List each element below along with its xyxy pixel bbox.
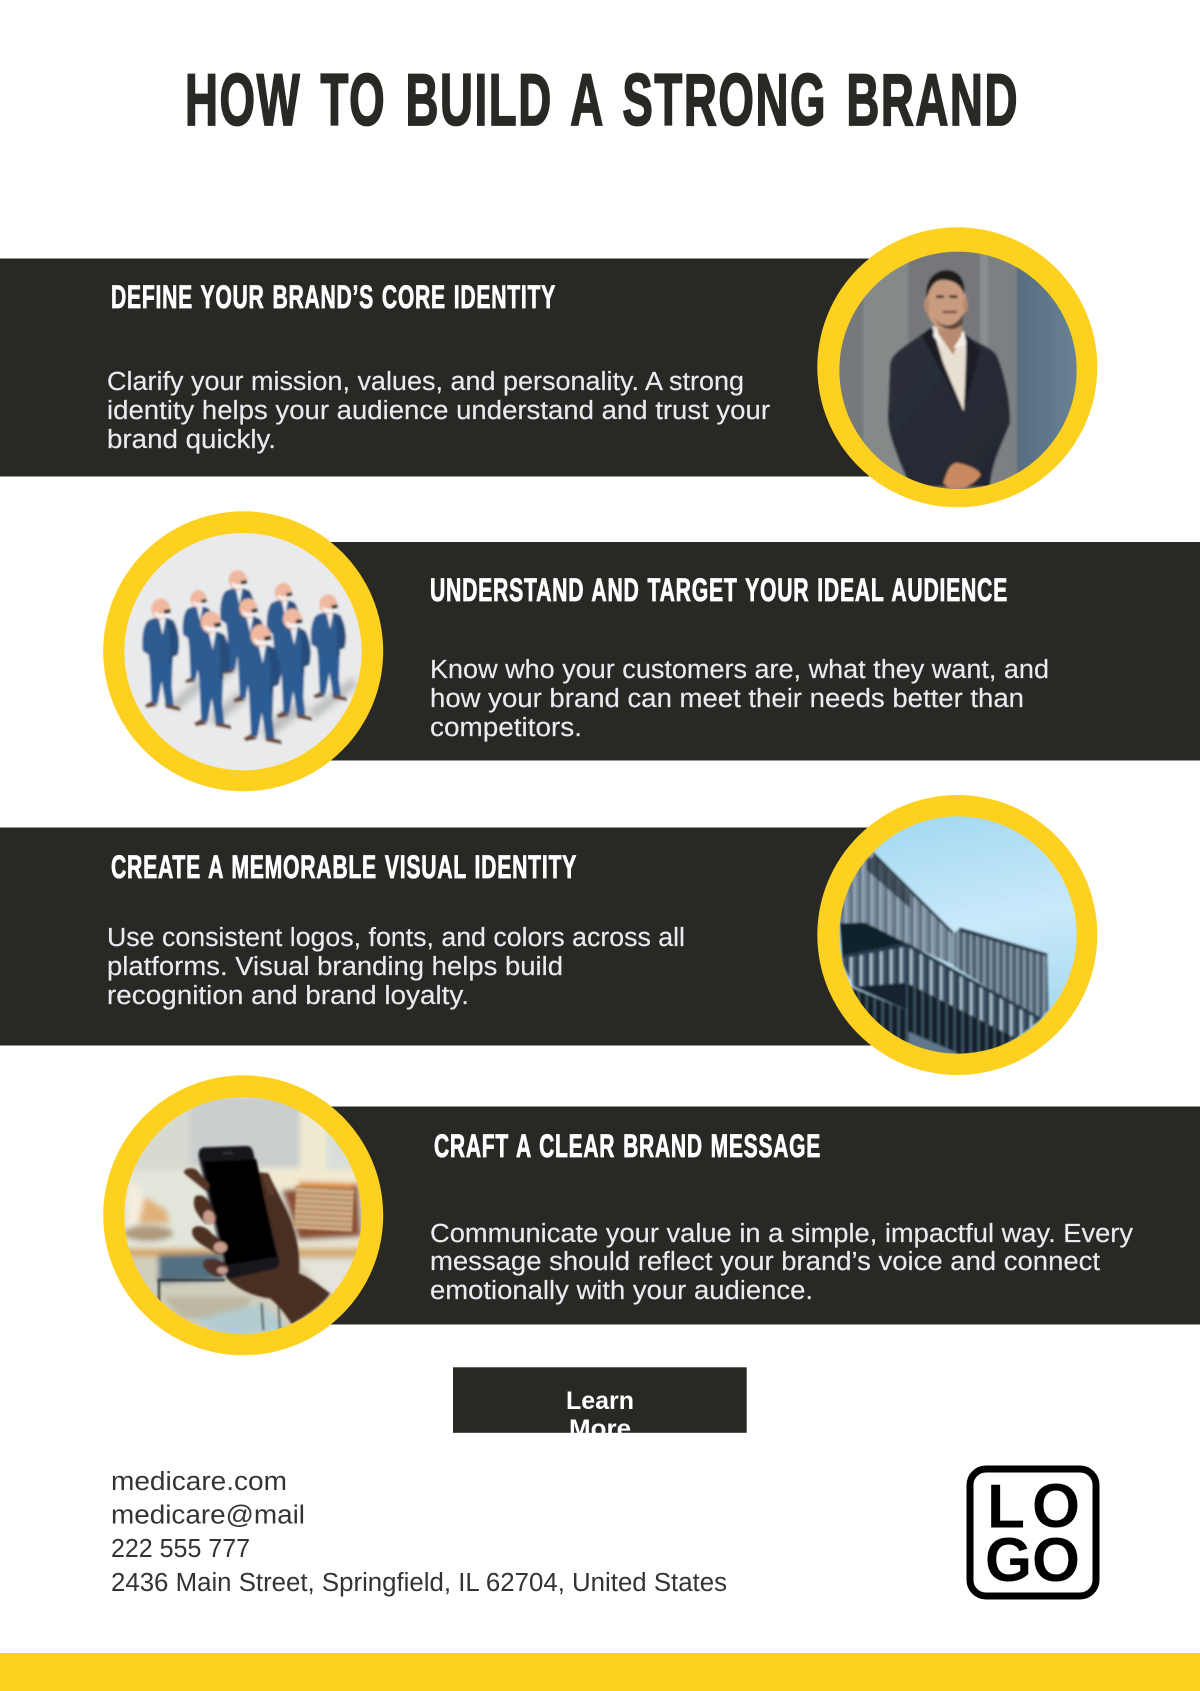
body text: emotionally with your audience. (430, 1277, 813, 1305)
heading: CREATE A MEMORABLE VISUAL IDENTITY (111, 849, 577, 885)
body text: message should reflect your brand’s voice and connect (430, 1248, 1100, 1276)
button: learn more (453, 1367, 747, 1433)
panel: craft a clear brand message (103, 1075, 1200, 1355)
photo: man in a dark suit (837, 250, 1081, 493)
logo: O (1032, 1472, 1080, 1541)
body text: Know who your customers are, what they want, and (430, 656, 1049, 684)
panel: define your brand's core identity (0, 227, 1097, 507)
yellow ring (103, 1075, 383, 1355)
body text: recognition and brand loyalty. (107, 982, 469, 1010)
yellow ring (817, 227, 1097, 507)
body text: how your brand can meet their needs better than (430, 685, 1024, 713)
photo: group of men in blue suits (122, 532, 365, 775)
body text (107, 368, 771, 454)
contact details: 222 555 777 (111, 1535, 250, 1563)
body text (430, 656, 1049, 742)
panel background bar (250, 542, 1200, 760)
logo (970, 1469, 1096, 1596)
heading: CRAFT A CLEAR BRAND MESSAGE (434, 1128, 821, 1164)
body text: Use consistent logos, fonts, and colors across all (107, 924, 685, 952)
body text: brand quickly. (107, 426, 276, 454)
panel: create a memorable visual identity (0, 795, 1097, 1075)
photo: hand holding a smartphone in a living room (122, 1093, 365, 1340)
panel: understand and target your ideal audience (103, 511, 1200, 791)
logo: L (987, 1472, 1025, 1542)
contact details: medicare@mail (111, 1502, 305, 1530)
contact details: 2436 Main Street, Springfield, IL 62704, United States (111, 1569, 727, 1597)
yellow ring (103, 511, 383, 791)
button: learn more: More (569, 1415, 631, 1443)
contact details: medicare.com (111, 1468, 287, 1496)
heading: DEFINE YOUR BRAND’S CORE IDENTITY (111, 279, 556, 315)
panel background bar (250, 1106, 1200, 1324)
body text: Clarify your mission, values, and personality. A strong (107, 368, 744, 396)
body text: competitors. (430, 714, 582, 742)
body text (430, 1220, 1133, 1305)
body text: Communicate your value in a simple, impactful way. Every (430, 1220, 1133, 1248)
logo: G (985, 1526, 1032, 1595)
panel background bar (0, 828, 950, 1046)
yellow ring (817, 795, 1097, 1075)
panel background bar (0, 258, 950, 476)
footer band (0, 1653, 1200, 1691)
photo: modern glass building against the sky (837, 813, 1080, 1057)
logo: O (1032, 1526, 1080, 1595)
button: learn more: Learn (566, 1387, 634, 1415)
body text (107, 924, 685, 1010)
contact details (111, 1468, 727, 1597)
body text: platforms. Visual branding helps build (107, 953, 563, 981)
body text: identity helps your audience understand and trust your (107, 397, 771, 425)
